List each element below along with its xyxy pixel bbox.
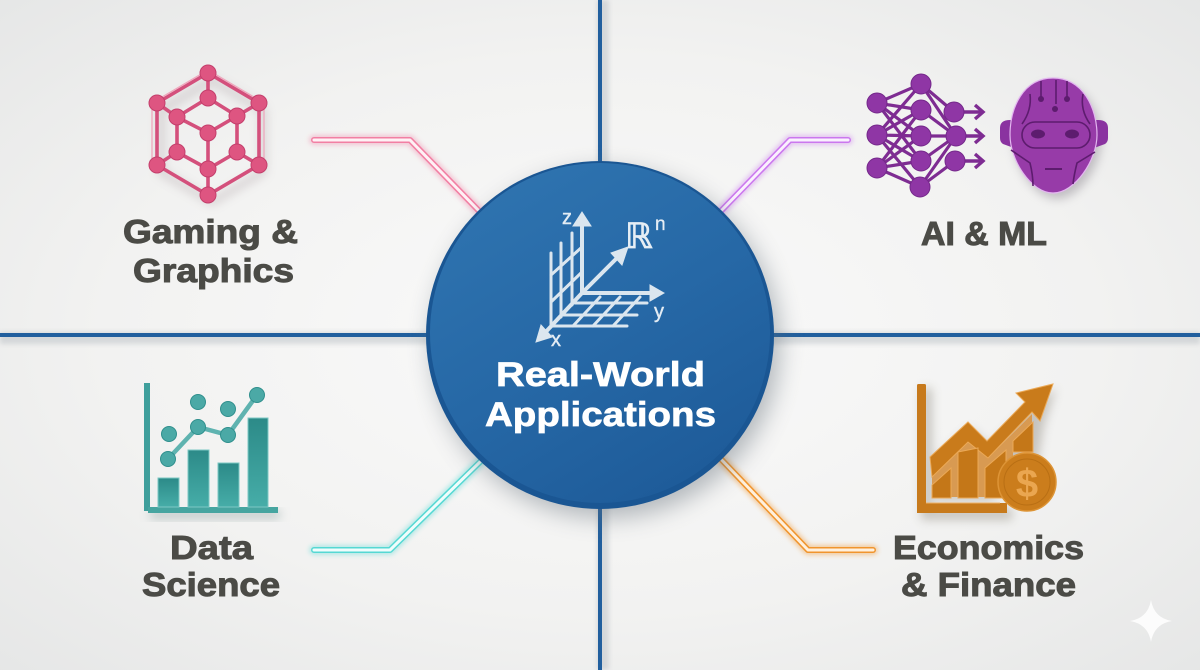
icon: neural network [867,74,983,197]
icon: coordinate axes grid [536,207,666,351]
connector: pink [314,140,482,214]
connector: orange [718,456,873,550]
label: gaming and graphics [123,213,298,289]
icon: robot head [1000,78,1108,199]
connector: purple [718,140,848,214]
icon: coordinate axes grid: z [562,207,572,229]
label: ai and ml: AI & ML [921,215,1047,252]
label: economics and finance [893,529,1084,603]
label: gaming and graphics: Gaming & [123,213,298,250]
central disc: real-world applications [426,161,780,518]
label: data science: Science [142,566,280,603]
label: economics and finance: Economics [893,529,1084,566]
icon: coordinate axes grid: x [551,329,561,351]
icon: coordinate axes grid: y [654,301,664,323]
connector: teal [314,460,482,550]
label: data science: Data [170,529,254,566]
icon: coordinate axes grid: n [655,214,666,235]
title: Real-World [496,356,705,394]
label: economics and finance: & Finance [901,566,1076,603]
title [485,356,716,434]
icon: finance chart: $ [1016,462,1038,506]
label: data science [142,529,280,603]
icon: wireframe cube [149,65,267,203]
icon: coordinate axes grid: ℝ [625,217,653,257]
icon: finance chart [917,384,1056,520]
icon: sparkle watermark [1130,600,1172,642]
title: Applications [485,396,716,434]
icon: teal data chart [144,383,280,519]
label: gaming and graphics: Graphics [133,252,294,289]
